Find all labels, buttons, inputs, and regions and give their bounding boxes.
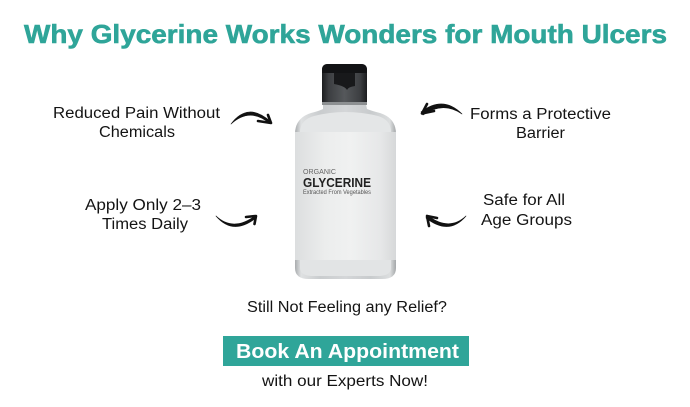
label text: ORGANIC bbox=[303, 169, 336, 176]
arrow: top left bbox=[231, 112, 271, 124]
label text: Extracted From Vegetables bbox=[303, 190, 371, 196]
prompt text: Still Not Feeling any Relief? bbox=[247, 299, 447, 316]
label text bbox=[303, 169, 371, 196]
glycerine bottle bbox=[295, 64, 396, 279]
arrow: top right bbox=[421, 104, 462, 115]
benefit: safe for all: Safe for All bbox=[483, 192, 565, 209]
benefit: safe for all: Age Groups bbox=[481, 212, 572, 229]
bottle body bbox=[295, 104, 396, 279]
label text: GLYCERINE bbox=[303, 175, 371, 190]
closing text: with our Experts Now! bbox=[261, 373, 428, 390]
benefit: reduced pain: Chemicals bbox=[99, 124, 175, 141]
base highlight bbox=[300, 260, 391, 276]
bottle label bbox=[295, 132, 396, 260]
shoulder highlight bbox=[300, 112, 391, 132]
benefit: protective barrier: Barrier bbox=[516, 125, 565, 142]
call to action button: Book An Appointment bbox=[236, 341, 459, 363]
bottle cap bbox=[322, 64, 367, 105]
call to action button bbox=[223, 336, 469, 366]
arrow: bottom left bbox=[216, 216, 256, 227]
title: Why Glycerine Works Wonders for Mouth Ulcers bbox=[24, 19, 667, 49]
arrow: bottom right bbox=[426, 215, 466, 227]
benefit: reduced pain: Reduced Pain Without bbox=[53, 105, 221, 122]
benefit: apply daily: Apply Only 2–3 bbox=[85, 197, 201, 214]
benefit: protective barrier: Forms a Protective bbox=[470, 106, 611, 123]
benefit: apply daily: Times Daily bbox=[102, 216, 188, 233]
